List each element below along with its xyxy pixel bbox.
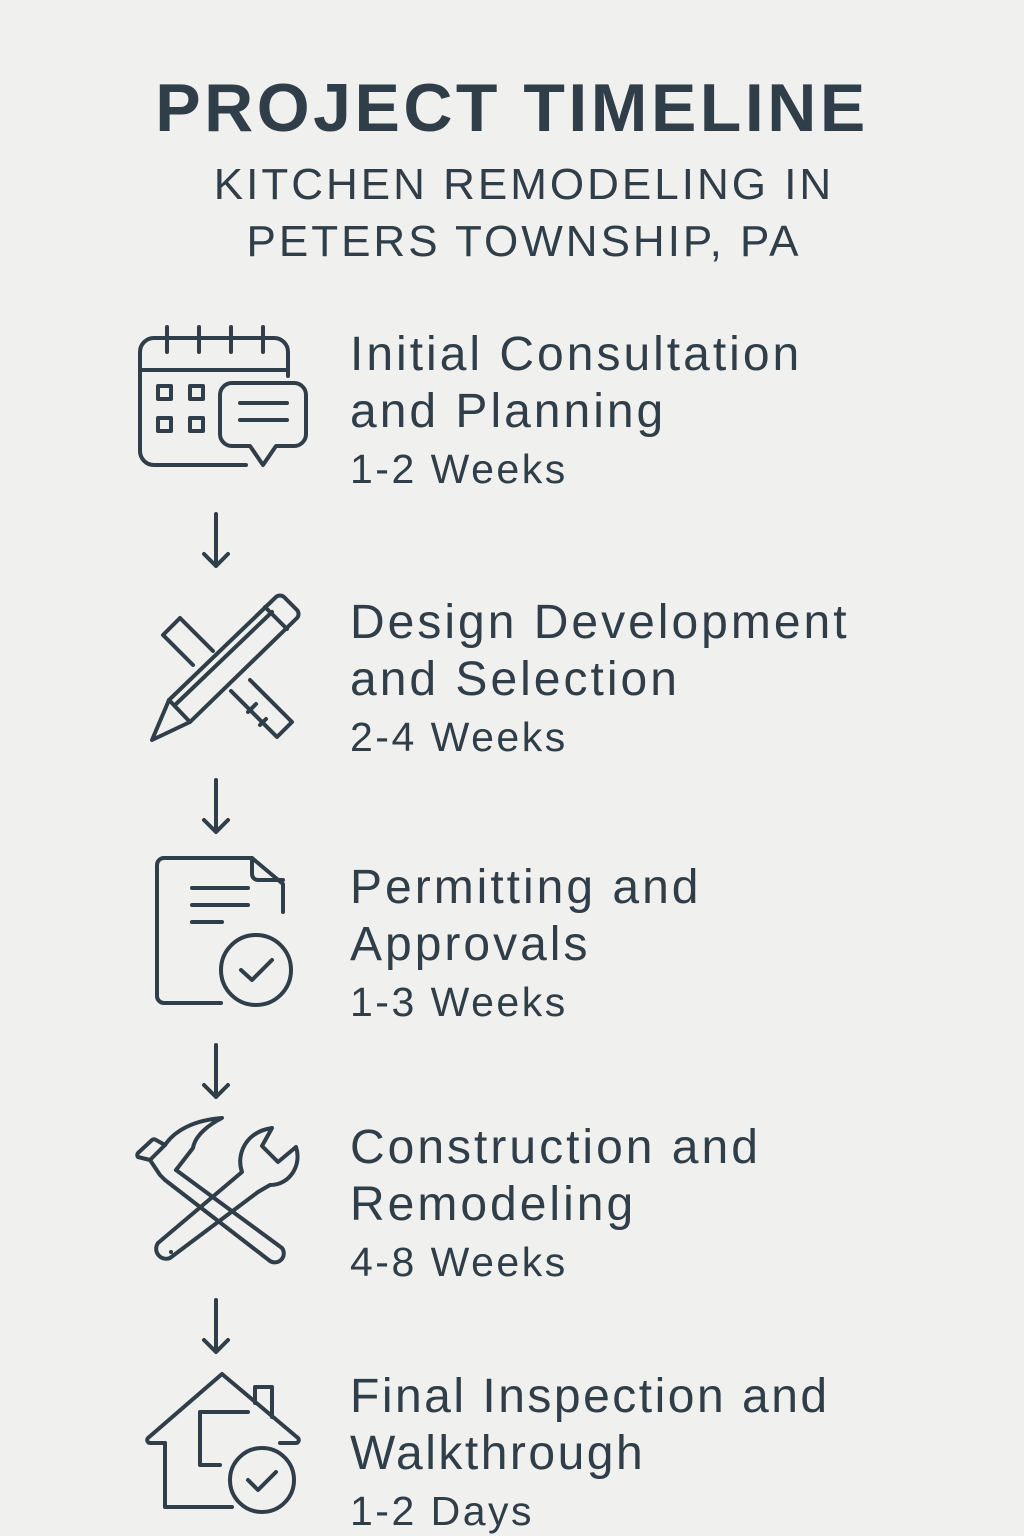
step 3 text: 1-3 Weeks <box>350 979 568 1025</box>
step 2 text: Design Development <box>350 596 850 649</box>
step 2 text <box>350 596 850 760</box>
subtitle <box>214 160 834 266</box>
step 4 text: Construction and <box>350 1121 761 1174</box>
step 3 text: Permitting and <box>350 861 702 914</box>
step 4 text <box>350 1121 761 1285</box>
arrow <box>204 780 228 832</box>
step 5 text: 1-2 Days <box>350 1488 534 1534</box>
step 1 text <box>350 328 802 492</box>
arrow <box>204 1300 228 1352</box>
step 5 text <box>350 1370 830 1534</box>
arrow <box>204 1045 228 1097</box>
icon: pencil and ruler <box>152 595 299 740</box>
icon: hammer and wrench <box>137 1118 298 1262</box>
step 4 text: Remodeling <box>350 1178 636 1231</box>
step 5 text: Final Inspection and <box>350 1370 830 1423</box>
step 1 text: 1-2 Weeks <box>350 446 568 492</box>
step 2 text: and Selection <box>350 653 680 706</box>
icon: permit document <box>157 858 291 1005</box>
title: PROJECT TIMELINE <box>155 70 869 146</box>
step 5 text: Walkthrough <box>350 1427 645 1480</box>
step 3 text: Approvals <box>350 918 590 971</box>
arrow <box>204 514 228 566</box>
icon: calendar <box>140 327 306 465</box>
step 4 text: 4-8 Weeks <box>350 1239 568 1285</box>
step 2 text: 2-4 Weeks <box>350 714 568 760</box>
step 1 text: Initial Consultation <box>350 328 802 381</box>
step 3 text <box>350 861 702 1025</box>
subtitle: PETERS TOWNSHIP, PA <box>246 217 802 266</box>
icon: house with check <box>147 1374 299 1512</box>
subtitle: KITCHEN REMODELING IN <box>214 160 834 209</box>
step 1 text: and Planning <box>350 385 666 438</box>
